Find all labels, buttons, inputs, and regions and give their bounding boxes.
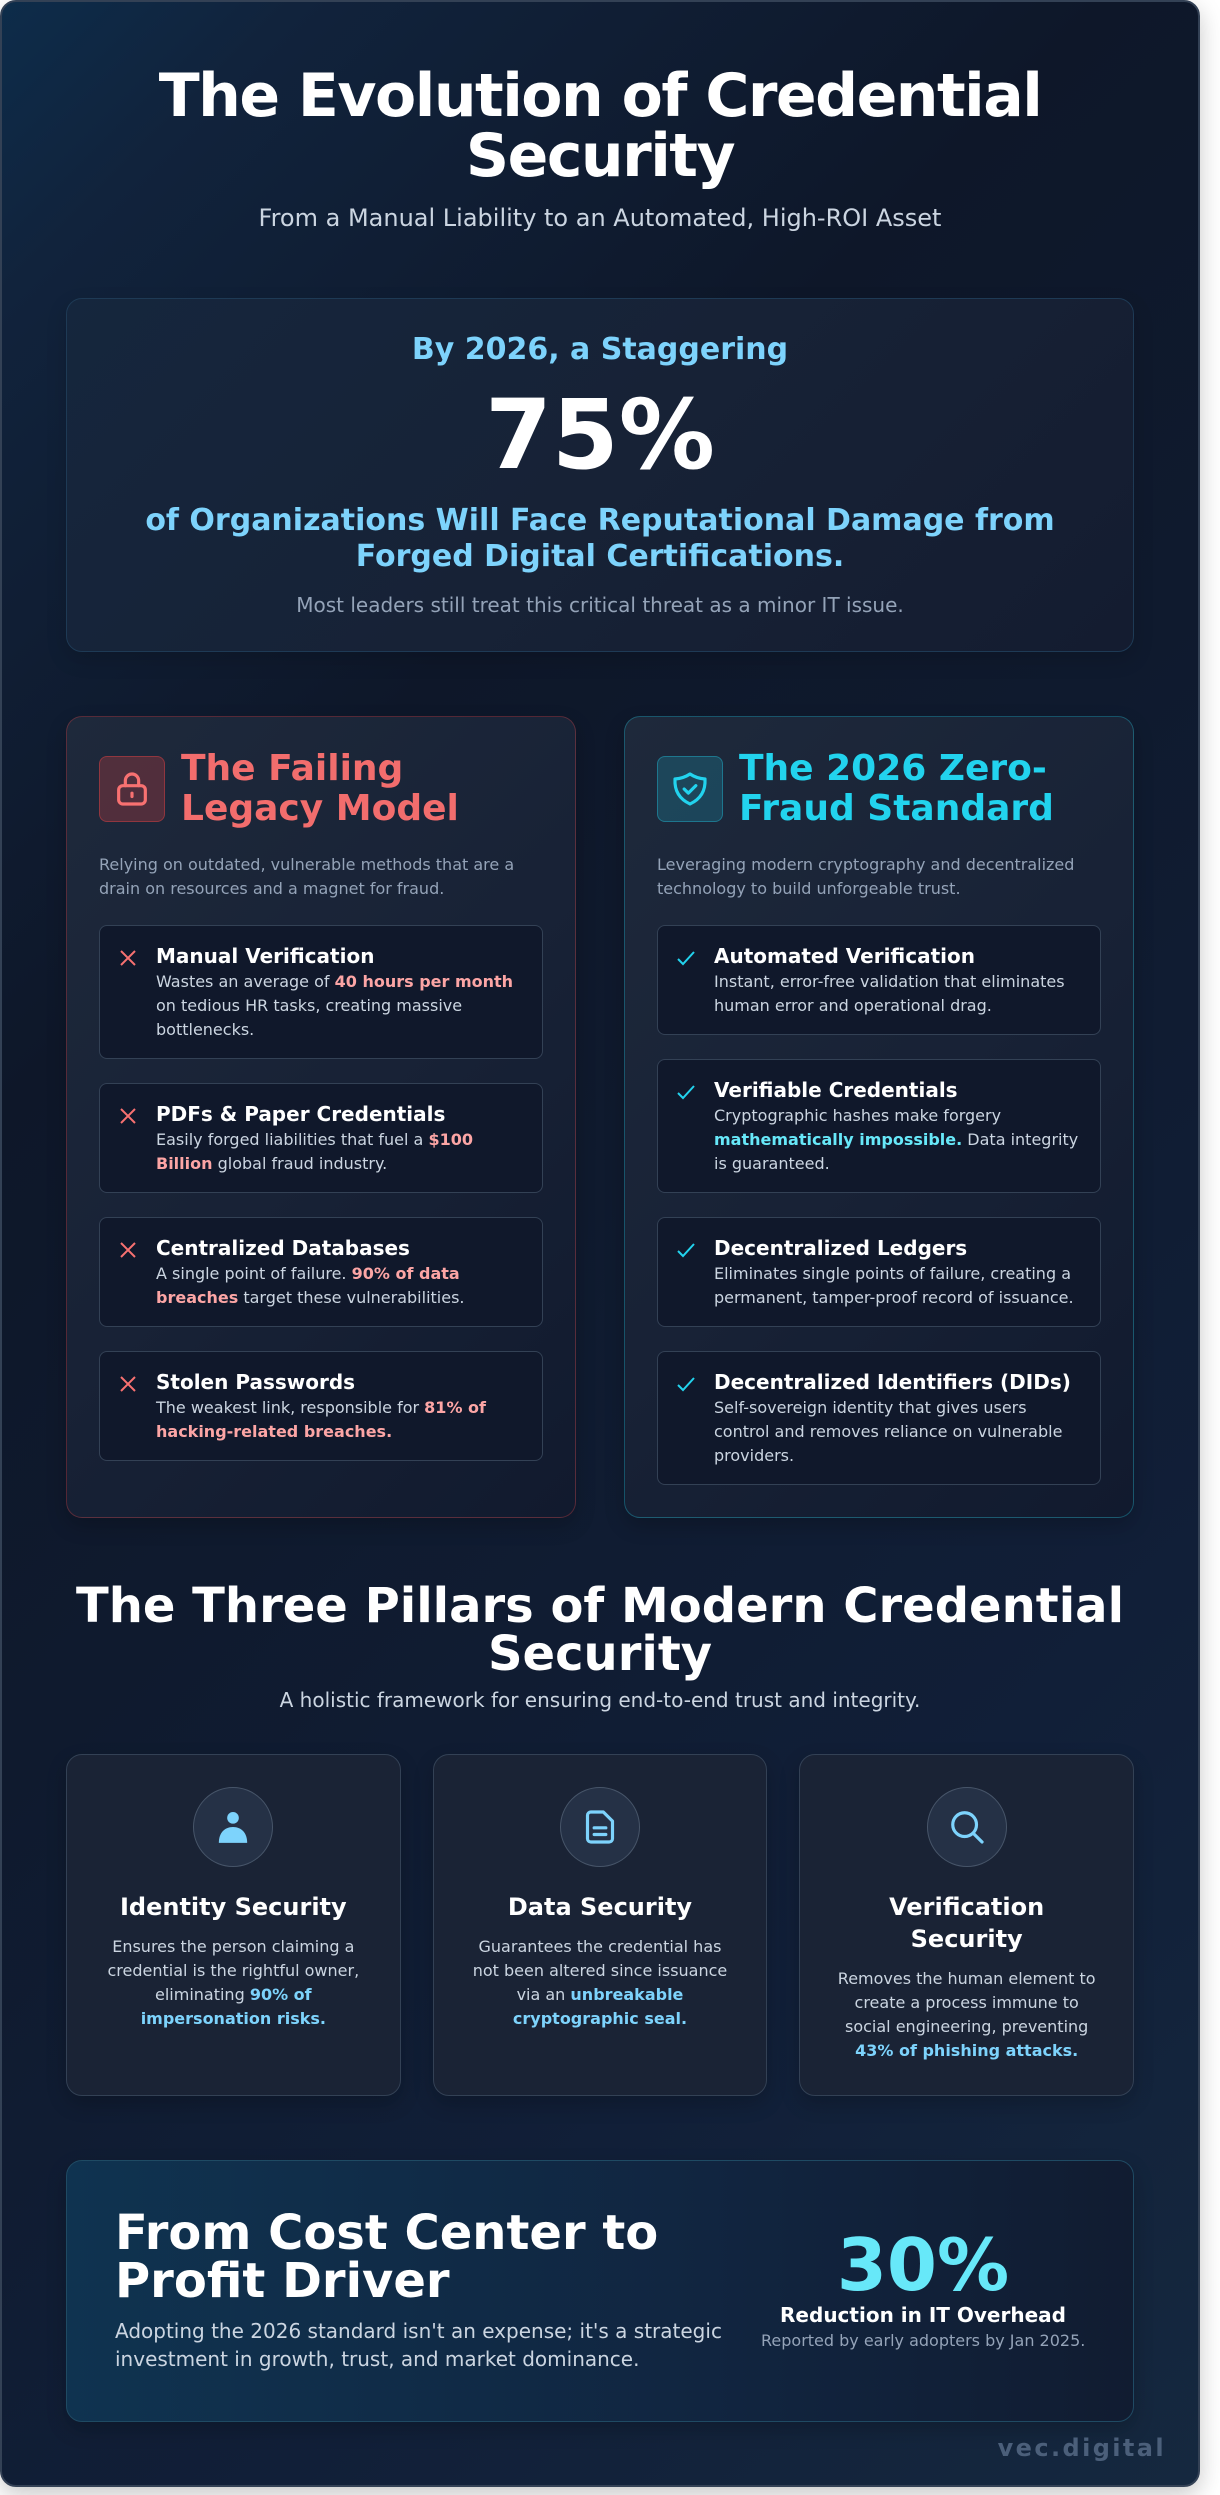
pillar: identity security: [66, 1754, 401, 2096]
item: centralized databases: A single point of failure. 90% of data breaches target these vulnerabilities.: [156, 1264, 464, 1307]
item: manual verification: Manual Verification: [156, 944, 374, 968]
metric note: Reported by early adopters by Jan 2025.: [761, 2331, 1085, 2350]
item: decentralized ledgers: Eliminates single points of failure, creating a permanent, tamper-proof record of issuance.: [714, 1264, 1074, 1307]
icon: person: [193, 1787, 273, 1867]
closing heading: From Cost Center to Profit Driver: [115, 2205, 658, 2309]
roi metric: [761, 2223, 1085, 2350]
item: manual verification: [99, 925, 543, 1059]
panel: failing legacy model: [66, 716, 576, 1518]
section subheading: A holistic framework for ensuring end-to-end trust and integrity.: [280, 1688, 920, 1712]
item: pdfs and paper: Easily forged liabilities that fuel a $100 Billion global fraud industry.: [156, 1130, 473, 1173]
item: verifiable credentials: [657, 1059, 1101, 1193]
item: verifiable credentials: Cryptographic hashes make forgery mathematically impossible. Data integrity is guaranteed.: [714, 1106, 1078, 1173]
watermark: vec.digital: [998, 2434, 1166, 2462]
panel: 75% statistic: [66, 298, 1134, 652]
item: manual verification: Wastes an average of 40 hours per month on tedious HR tasks, creating massive bottlenecks.: [156, 972, 513, 1039]
title: The Evolution of Credential Security: [159, 61, 1041, 191]
stat description: of Organizations Will Face Reputational Damage from Forged Digital Certifications.: [145, 503, 1055, 574]
stat number: 75%: [485, 379, 715, 491]
item: decentralized ledgers: [657, 1217, 1101, 1327]
pillar text: Removes the human element to create a process immune to social engineering, preventing 43% of phishing attacks.: [838, 1969, 1096, 2060]
panel heading: The Failing Legacy Model: [181, 748, 459, 829]
metric label: Reduction in IT Overhead: [780, 2303, 1066, 2327]
pillar title: Identity Security: [120, 1893, 347, 1921]
pillar title: Data Security: [508, 1893, 692, 1921]
pillar title: Verification Security: [889, 1893, 1044, 1953]
metric value: 30%: [837, 2223, 1009, 2307]
item: decentralized ledgers: Decentralized Ledgers: [714, 1236, 967, 1260]
icon: lock: [99, 756, 165, 822]
subtitle: From a Manual Liability to an Automated, High-ROI Asset: [259, 204, 941, 232]
pillar text: Ensures the person claiming a credential is the rightful owner, eliminating 90% of impersonation risks.: [107, 1937, 359, 2028]
icon: magnifier: [927, 1787, 1007, 1867]
item: automated verification: Automated Verification: [714, 944, 975, 968]
item: decentralized identifiers: Decentralized Identifiers (DIDs): [714, 1370, 1071, 1394]
panel intro: Leveraging modern cryptography and decentralized technology to build unforgeable trust.: [657, 855, 1074, 898]
section heading: three pillars: The Three Pillars of Modern Credential Security: [76, 1578, 1124, 1682]
item: automated verification: Instant, error-free validation that eliminates human error and operational drag.: [714, 972, 1065, 1015]
item: verifiable credentials: Verifiable Credentials: [714, 1078, 958, 1102]
item: stolen passwords: [99, 1351, 543, 1461]
item: centralized databases: Centralized Databases: [156, 1236, 410, 1260]
item: pdfs and paper: PDFs & Paper Credentials: [156, 1102, 445, 1126]
stat note: Most leaders still treat this critical threat as a minor IT issue.: [296, 593, 904, 617]
stat lead-in: By 2026, a Staggering: [412, 332, 788, 367]
item: centralized databases: [99, 1217, 543, 1327]
item: automated verification: [657, 925, 1101, 1035]
item: stolen passwords: Stolen Passwords: [156, 1370, 355, 1394]
item: pdfs and paper: [99, 1083, 543, 1193]
panel intro: Relying on outdated, vulnerable methods that are a drain on resources and a magnet for fraud.: [99, 855, 514, 898]
icon: document: [560, 1787, 640, 1867]
pillar text: Guarantees the credential has not been altered since issuance via an unbreakable cryptographic seal.: [473, 1937, 727, 2028]
pillar: verification security: [799, 1754, 1134, 2096]
closing text: Adopting the 2026 standard isn't an expense; it's a strategic investment in growth, trust, and market dominance.: [115, 2319, 722, 2371]
pillar: data security: [433, 1754, 767, 2096]
panel: cost center to profit driver: [66, 2160, 1134, 2422]
item: decentralized identifiers: [657, 1351, 1101, 1485]
panel heading: The 2026 Zero-Fraud Standard: [739, 748, 1054, 829]
item: stolen passwords: The weakest link, responsible for 81% of hacking-related breaches.: [156, 1398, 486, 1441]
panel: zero-fraud standard: [624, 716, 1134, 1518]
icon: shield check: [657, 756, 723, 822]
item: decentralized identifiers: Self-sovereign identity that gives users control and removes reliance on vulnerable providers.: [714, 1398, 1062, 1465]
